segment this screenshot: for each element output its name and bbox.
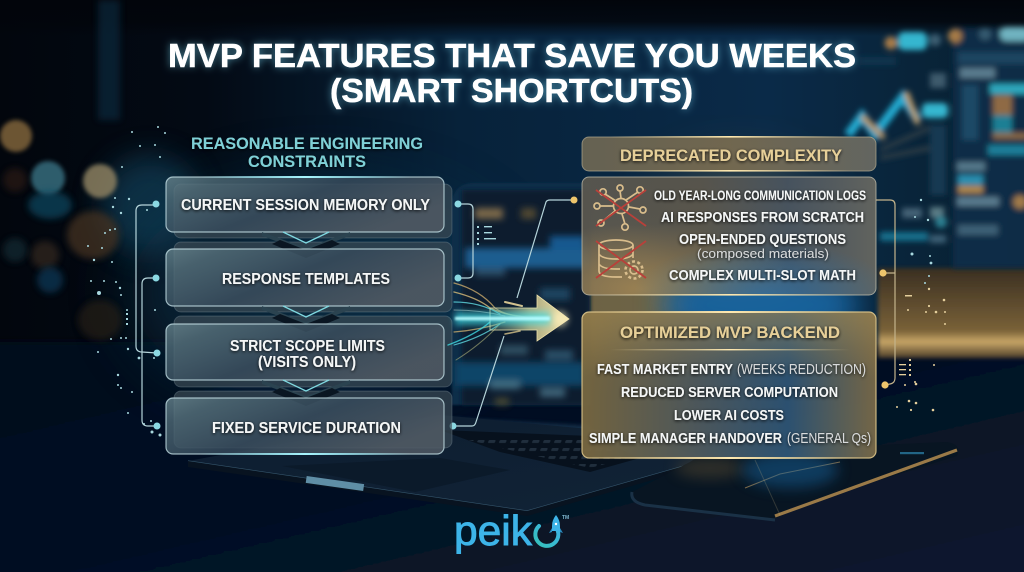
list items: COMPLEX MULTI-SLOT MATH [669,268,856,284]
back plates [174,184,452,448]
connector nodes: left column [152,200,462,430]
benefit list: (WEEKS REDUCTION) [737,362,866,378]
list items: OPEN-ENDED QUESTIONS [679,232,846,248]
benefit list: SIMPLE MANAGER HANDOVER [589,431,782,447]
benefit list: (GENERAL Qs) [787,431,871,447]
connectors: right column [570,196,895,389]
panel: deprecated complexity list [582,177,876,296]
panel: optimized mvp backend [582,311,876,459]
box: strict scope limits: STRICT SCOPE LIMITS [230,338,385,355]
benefit list: REDUCED SERVER COMPUTATION [621,385,838,401]
laptop hinge and keyboard [188,415,712,516]
right dashboard [848,27,1024,268]
chevron 2 [262,306,350,332]
phone [631,442,958,520]
box: fixed service duration [166,398,444,454]
panel: deprecated complexity header [582,136,876,172]
panel: deprecated complexity header: DEPRECATED COMPLEXITY [620,146,843,165]
box: current session memory only [166,177,444,232]
chevron 3 [262,380,350,406]
logo: peiko: TM [562,515,569,521]
list items [654,188,866,284]
particles [87,126,932,436]
title [168,37,856,109]
heading: OPTIMIZED MVP BACKEND [620,323,840,342]
benefit list: LOWER AI COSTS [674,408,784,424]
panel: constraints stack [166,176,452,455]
heading: reasonable engineering constraints: CONSTRAINTS [248,153,366,171]
arrow: flow into right column [448,283,569,360]
logo: peiko [454,507,569,554]
title: MVP FEATURES THAT SAVE YOU WEEKS [168,37,856,74]
icon: crossed-out network [594,185,646,230]
logo: peiko: peik [454,507,533,554]
gold table glow right [878,268,1024,358]
list items: OLD YEAR-LONG COMMUNICATION LOGS [654,188,866,203]
icon: crossed-out database with gear [596,240,646,278]
box: current session memory only: CURRENT SESSION MEMORY ONLY [181,197,431,214]
connectors: left column [136,200,574,426]
box: strict scope limits: (VISITS ONLY) [258,354,356,371]
list items: (composed materials) [697,246,829,261]
list items: AI RESPONSES FROM SCRATCH [661,210,864,226]
box: response templates: RESPONSE TEMPLATES [222,271,390,288]
left bokeh [0,120,122,340]
box: response templates [166,249,444,306]
particles: gold [896,288,946,411]
title: (SMART SHORTCUTS) [330,72,693,109]
chevron 1 [262,232,350,258]
laptop screen [452,183,590,405]
heading: reasonable engineering constraints: REASONABLE ENGINEERING [191,135,423,153]
box: fixed service duration: FIXED SERVICE DURATION [212,420,401,437]
heading: reasonable engineering constraints [191,135,423,171]
benefit list: FAST MARKET ENTRY [597,362,733,378]
benefit list [589,362,871,447]
box: strict scope limits [166,324,444,380]
